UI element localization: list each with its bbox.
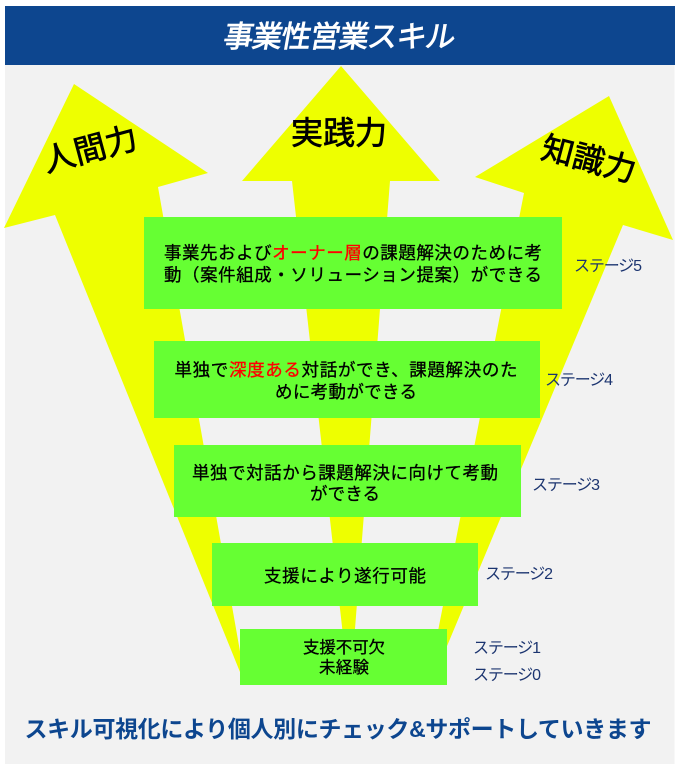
stage 1 label: ステージ1 xyxy=(473,640,541,657)
arrow: human skills: 人間力 xyxy=(39,120,141,179)
arrow: knowledge skills: 知識力 xyxy=(538,130,640,189)
stage 2 label: ステージ2 xyxy=(485,566,553,583)
stage 4 label: ステージ4 xyxy=(545,372,613,389)
arrow: human skills xyxy=(4,84,244,674)
stage 1 and 0 box xyxy=(240,629,447,685)
stage 5 box: 事業先およびオーナー層の課題解決のために考 xyxy=(164,243,542,263)
stage 5 label: ステージ5 xyxy=(574,258,642,275)
stage 3 label: ステージ3 xyxy=(532,477,600,494)
arrow: knowledge skills xyxy=(428,96,673,682)
title banner: 事業性営業スキル xyxy=(221,20,459,54)
stage 4 box: 単独で深度ある対話ができ、課題解決のた xyxy=(174,360,518,380)
stage 2 box: 支援により遂行可能 xyxy=(264,566,426,586)
stage 2 box xyxy=(212,543,478,606)
stage 5 box: 動（案件組成・ソリューション提案）ができる xyxy=(164,265,542,285)
stage 4 box xyxy=(154,341,540,418)
arrow: practical skills xyxy=(242,66,440,680)
stage 3 box: ができる xyxy=(310,484,380,504)
stage 3 box xyxy=(174,445,521,517)
stage 5 box xyxy=(144,217,562,309)
stage 0 label: ステージ0 xyxy=(473,667,541,684)
arrow: practical skills: 実践力 xyxy=(291,115,387,151)
stage 1 and 0 box: 未経験 xyxy=(319,658,370,677)
stage 1 and 0 box: 支援不可欠 xyxy=(303,638,385,657)
stage 3 box: 単独で対話から課題解決に向けて考動 xyxy=(192,463,498,483)
title banner xyxy=(5,6,675,65)
stage 4 box: めに考動ができる xyxy=(275,382,417,402)
bottom message: スキル可視化により個人別にチェック&サポートしていきます xyxy=(24,716,652,742)
